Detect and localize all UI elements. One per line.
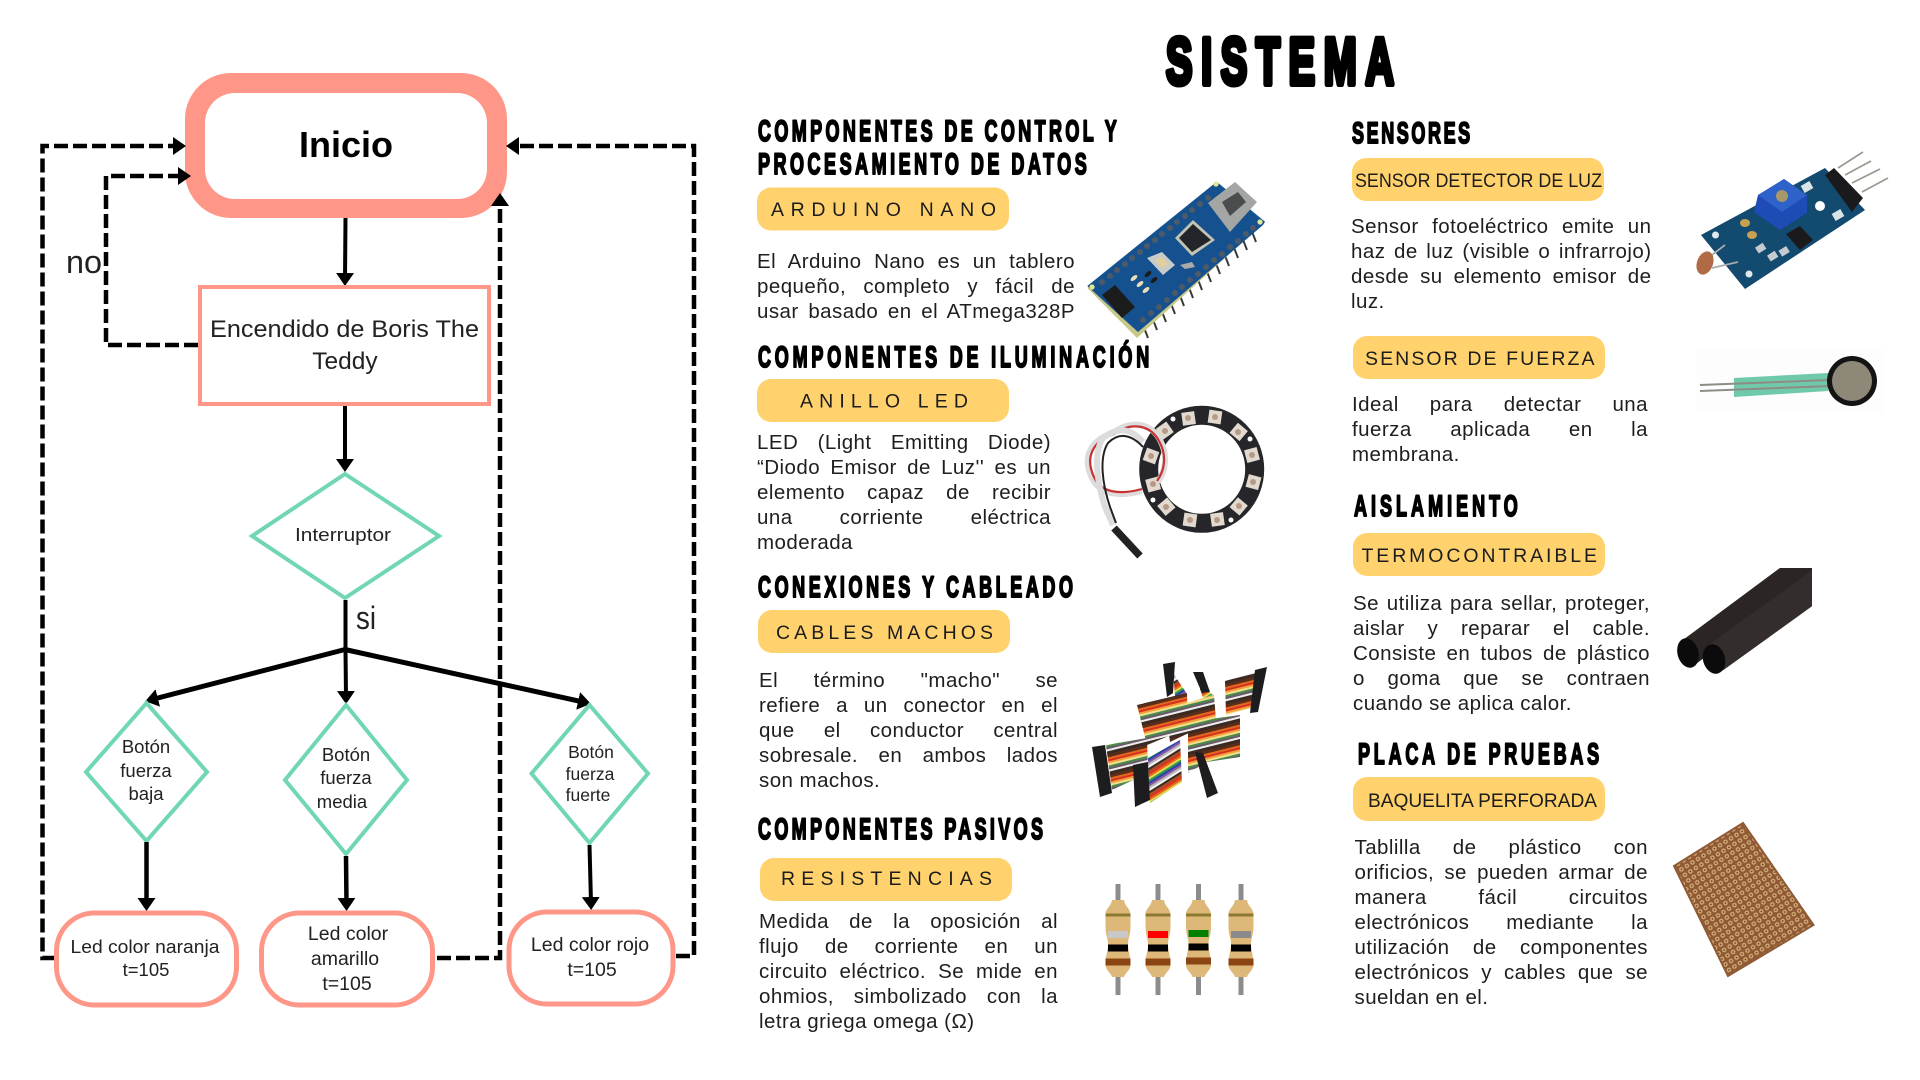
label: no: no	[66, 244, 102, 280]
node: Led color rojo	[509, 912, 673, 1004]
arrow: fuerte to led rojo	[590, 845, 591, 903]
text: Cables machos: refiere a un conector en el	[759, 694, 1058, 717]
pill: Cables machos	[758, 610, 1010, 653]
node: Inicio	[185, 73, 507, 218]
pill: Sensor detector de luz	[1352, 158, 1604, 201]
decision: Interruptor	[252, 474, 439, 598]
image: resistor gray	[1228, 884, 1254, 995]
text: Termocontraible: Se utiliza para sellar, proteger,	[1353, 592, 1650, 615]
text: Baquelita perforada: sueldan en el.	[1354, 986, 1488, 1009]
node: Led color amarillo: t=105	[322, 973, 372, 995]
text: Termocontraible: Consiste en tubos de plástico	[1353, 642, 1650, 665]
text: Arduino Nano	[757, 249, 1079, 329]
decision: Boton fuerza media: fuerza	[320, 767, 372, 788]
decision: Boton fuerza media: media	[317, 791, 368, 812]
text: Baquelita perforada: utilización de componentes	[1354, 936, 1648, 959]
decision: Interruptor: Interruptor	[295, 525, 391, 545]
section: conexiones	[758, 572, 1267, 807]
heading: aislamiento: AISLAMIENTO	[1354, 491, 1518, 523]
node: Led color naranja: t=105	[123, 959, 169, 980]
heading: conexiones y cableado: CONEXIONES Y CABLEADO	[758, 572, 1073, 604]
decision: Boton fuerza baja: Botón	[122, 736, 170, 757]
text: Sensor detector de luz: haz de luz (visible o infrarrojo)	[1351, 240, 1652, 263]
section: componentes de control	[757, 116, 1265, 338]
panel: sistema components	[757, 25, 1888, 1033]
section: placa de pruebas	[1353, 739, 1814, 1015]
arrow: baja to led naranja	[144, 842, 149, 904]
decision: Boton fuerza media	[285, 705, 407, 854]
node: Encendido de Boris The Teddy	[200, 287, 489, 404]
node: Led color amarillo: Led color	[308, 923, 389, 945]
section: iluminacion	[757, 340, 1261, 560]
arrow: media to led amarillo	[344, 856, 349, 904]
text: Baquelita perforada: electrónicos mediante la	[1354, 911, 1648, 934]
heading: control y procesamiento	[758, 116, 1117, 181]
label: si: si	[356, 600, 376, 636]
dashed return: naranja to Inicio	[42, 146, 179, 958]
text: Sensor detector de luz	[1351, 214, 1655, 319]
text: Cables machos: que el conductor central	[759, 719, 1058, 742]
image: resistor silver	[1106, 884, 1130, 995]
text: Cables machos: sobresale. en ambos lados	[759, 744, 1058, 767]
image: jumper cable ribbons	[1092, 662, 1267, 807]
dashed return: Encendido no to Inicio	[106, 176, 198, 345]
text: Cables machos	[759, 668, 1061, 798]
section: aislamiento	[1353, 491, 1832, 721]
text: Arduino Nano: pequeño, completo y fácil de	[757, 275, 1075, 298]
text: Termocontraible	[1353, 591, 1654, 721]
node: Led color amarillo: amarillo	[311, 948, 379, 970]
text: Resistencias: letra griega omega (Ω)	[759, 1010, 975, 1033]
text: Baquelita perforada	[1354, 835, 1650, 1015]
node: Led color naranja: Led color naranja	[70, 936, 220, 957]
decision: Boton fuerza fuerte: fuerza	[566, 764, 615, 784]
pill: Arduino Nano	[757, 188, 1009, 230]
decision: Boton fuerza media: Botón	[322, 744, 370, 765]
text: Resistencias: Medida de la oposición al	[759, 910, 1058, 933]
text: Termocontraible: cuando se aplica calor.	[1353, 692, 1572, 715]
node: Led color naranja	[56, 913, 236, 1005]
text: Anillo LED: LED (Light Emitting Diode)	[757, 431, 1051, 454]
pill: Termocontraible: TERMOCONTRAIBLE	[1362, 545, 1597, 567]
text: Resistencias: ohmios, simbolizado con la	[759, 985, 1058, 1008]
text: Sensor de fuerza: Ideal para detectar una	[1352, 393, 1648, 416]
text: Sensor de fuerza: fuerza aplicada en la	[1352, 418, 1648, 441]
node: Led color rojo: t=105	[567, 959, 617, 981]
pill: Anillo LED: ANILLO LED	[800, 390, 968, 412]
node: Encendido de Boris The Teddy: Encendido de Boris The	[210, 316, 479, 343]
dashed return: amarillo to Inicio	[437, 200, 500, 958]
pill: Sensor detector de luz: SENSOR DETECTOR DE LUZ	[1355, 170, 1602, 192]
decision: Boton fuerza fuerte	[532, 705, 648, 843]
text: Sensor de fuerza: membrana.	[1352, 443, 1460, 466]
arrow: Encendido to Interruptor	[343, 406, 347, 465]
decision: Boton fuerza baja: baja	[129, 783, 164, 804]
arrow: to boton media	[344, 650, 348, 697]
text: Sensor detector de luz: desde su elemento emisor de	[1351, 265, 1652, 288]
image: force sensor	[1697, 350, 1884, 413]
text: Arduino Nano: usar basado en el ATmega328P	[757, 300, 1075, 323]
pill: Resistencias: RESISTENCIAS	[781, 868, 992, 890]
text: Baquelita perforada: Tablilla de plástico con	[1354, 836, 1648, 859]
image: heat shrink tubes	[1677, 568, 1812, 674]
image: light sensor module	[1693, 152, 1888, 289]
pill: Resistencias	[760, 858, 1012, 901]
panel: flowchart	[40, 73, 696, 1008]
text: Baquelita perforada: manera fácil circuitos	[1354, 886, 1648, 909]
heading: control y procesamiento: COMPONENTES DE CONTROL Y	[758, 116, 1117, 148]
text: Baquelita perforada: electrónicos y cables que se	[1354, 961, 1648, 984]
text: Cables machos: son machos.	[759, 769, 880, 792]
text: Sensor detector de luz: Sensor fotoeléctrico emite un	[1351, 215, 1652, 238]
heading: sensores: SENSORES	[1352, 118, 1470, 150]
text: Resistencias	[759, 909, 1061, 1039]
text: Baquelita perforada: orificios, se pueden armar de	[1354, 861, 1648, 884]
pill: Arduino Nano: ARDUINO NANO	[771, 199, 996, 221]
text: Anillo LED	[757, 430, 1055, 560]
arrow: to boton fuerte	[345, 650, 584, 702]
decision: Boton fuerza fuerte: fuerte	[566, 785, 610, 805]
arrow: Inicio to Encendido	[343, 218, 348, 279]
arrow: si stem	[344, 600, 348, 650]
image: resistor red	[1146, 884, 1170, 995]
text: Sensor detector de luz: luz.	[1351, 290, 1385, 313]
pill: Baquelita perforada: BAQUELITA PERFORADA	[1368, 790, 1597, 812]
text: Anillo LED: una corriente eléctrica	[757, 506, 1051, 529]
text: Anillo LED: moderada	[757, 531, 853, 554]
dashed return: rojo to Inicio	[513, 146, 694, 956]
image: resistor green	[1186, 884, 1211, 995]
decision: Boton fuerza baja: fuerza	[120, 760, 172, 781]
text: Resistencias: circuito eléctrico. Se mide en	[759, 960, 1058, 983]
image: Arduino Nano board	[1087, 181, 1265, 338]
decision: Boton fuerza baja	[86, 703, 207, 841]
heading: control y procesamiento: PROCESAMIENTO DE DATOS	[758, 149, 1087, 181]
node: Encendido de Boris The Teddy: Teddy	[312, 348, 378, 375]
image: perforated board	[1674, 823, 1814, 976]
text: Arduino Nano: El Arduino Nano es un tablero	[757, 250, 1075, 273]
text: Anillo LED: “Diodo Emisor de Luz'' es un	[757, 456, 1051, 479]
heading: iluminacion: COMPONENTES DE ILUMINACIÓN	[758, 340, 1149, 374]
pill: Cables machos: CABLES MACHOS	[776, 622, 993, 644]
text: Termocontraible: aislar y reparar el cable.	[1353, 617, 1650, 640]
text: Termocontraible: o goma que se contraen	[1353, 667, 1650, 690]
pill: Anillo LED	[757, 379, 1009, 422]
title: SISTEMA	[1166, 25, 1394, 99]
pill: Baquelita perforada	[1353, 777, 1605, 821]
decision: Boton fuerza fuerte: Botón	[568, 742, 614, 762]
pill: Sensor de fuerza	[1353, 336, 1605, 379]
pill: Termocontraible	[1353, 533, 1605, 576]
text: Resistencias: flujo de corriente en un	[759, 935, 1058, 958]
text: Cables machos: El término "macho" se	[759, 669, 1058, 692]
section: componentes pasivos	[758, 814, 1254, 1039]
text: Anillo LED: elemento capaz de recibir	[757, 481, 1051, 504]
image: LED ring	[1088, 410, 1261, 556]
heading: placa de pruebas: PLACA DE PRUEBAS	[1358, 739, 1599, 771]
text: Sensor de fuerza	[1352, 392, 1651, 472]
node: Led color rojo: Led color rojo	[531, 934, 649, 956]
node: Led color amarillo	[262, 913, 432, 1005]
pill: Sensor de fuerza: SENSOR DE FUERZA	[1365, 348, 1594, 370]
section: sensores	[1351, 118, 1888, 472]
node: Inicio: Inicio	[299, 124, 393, 165]
heading: componentes pasivos: COMPONENTES PASIVOS	[758, 814, 1043, 846]
arrow: to boton baja	[152, 650, 345, 700]
